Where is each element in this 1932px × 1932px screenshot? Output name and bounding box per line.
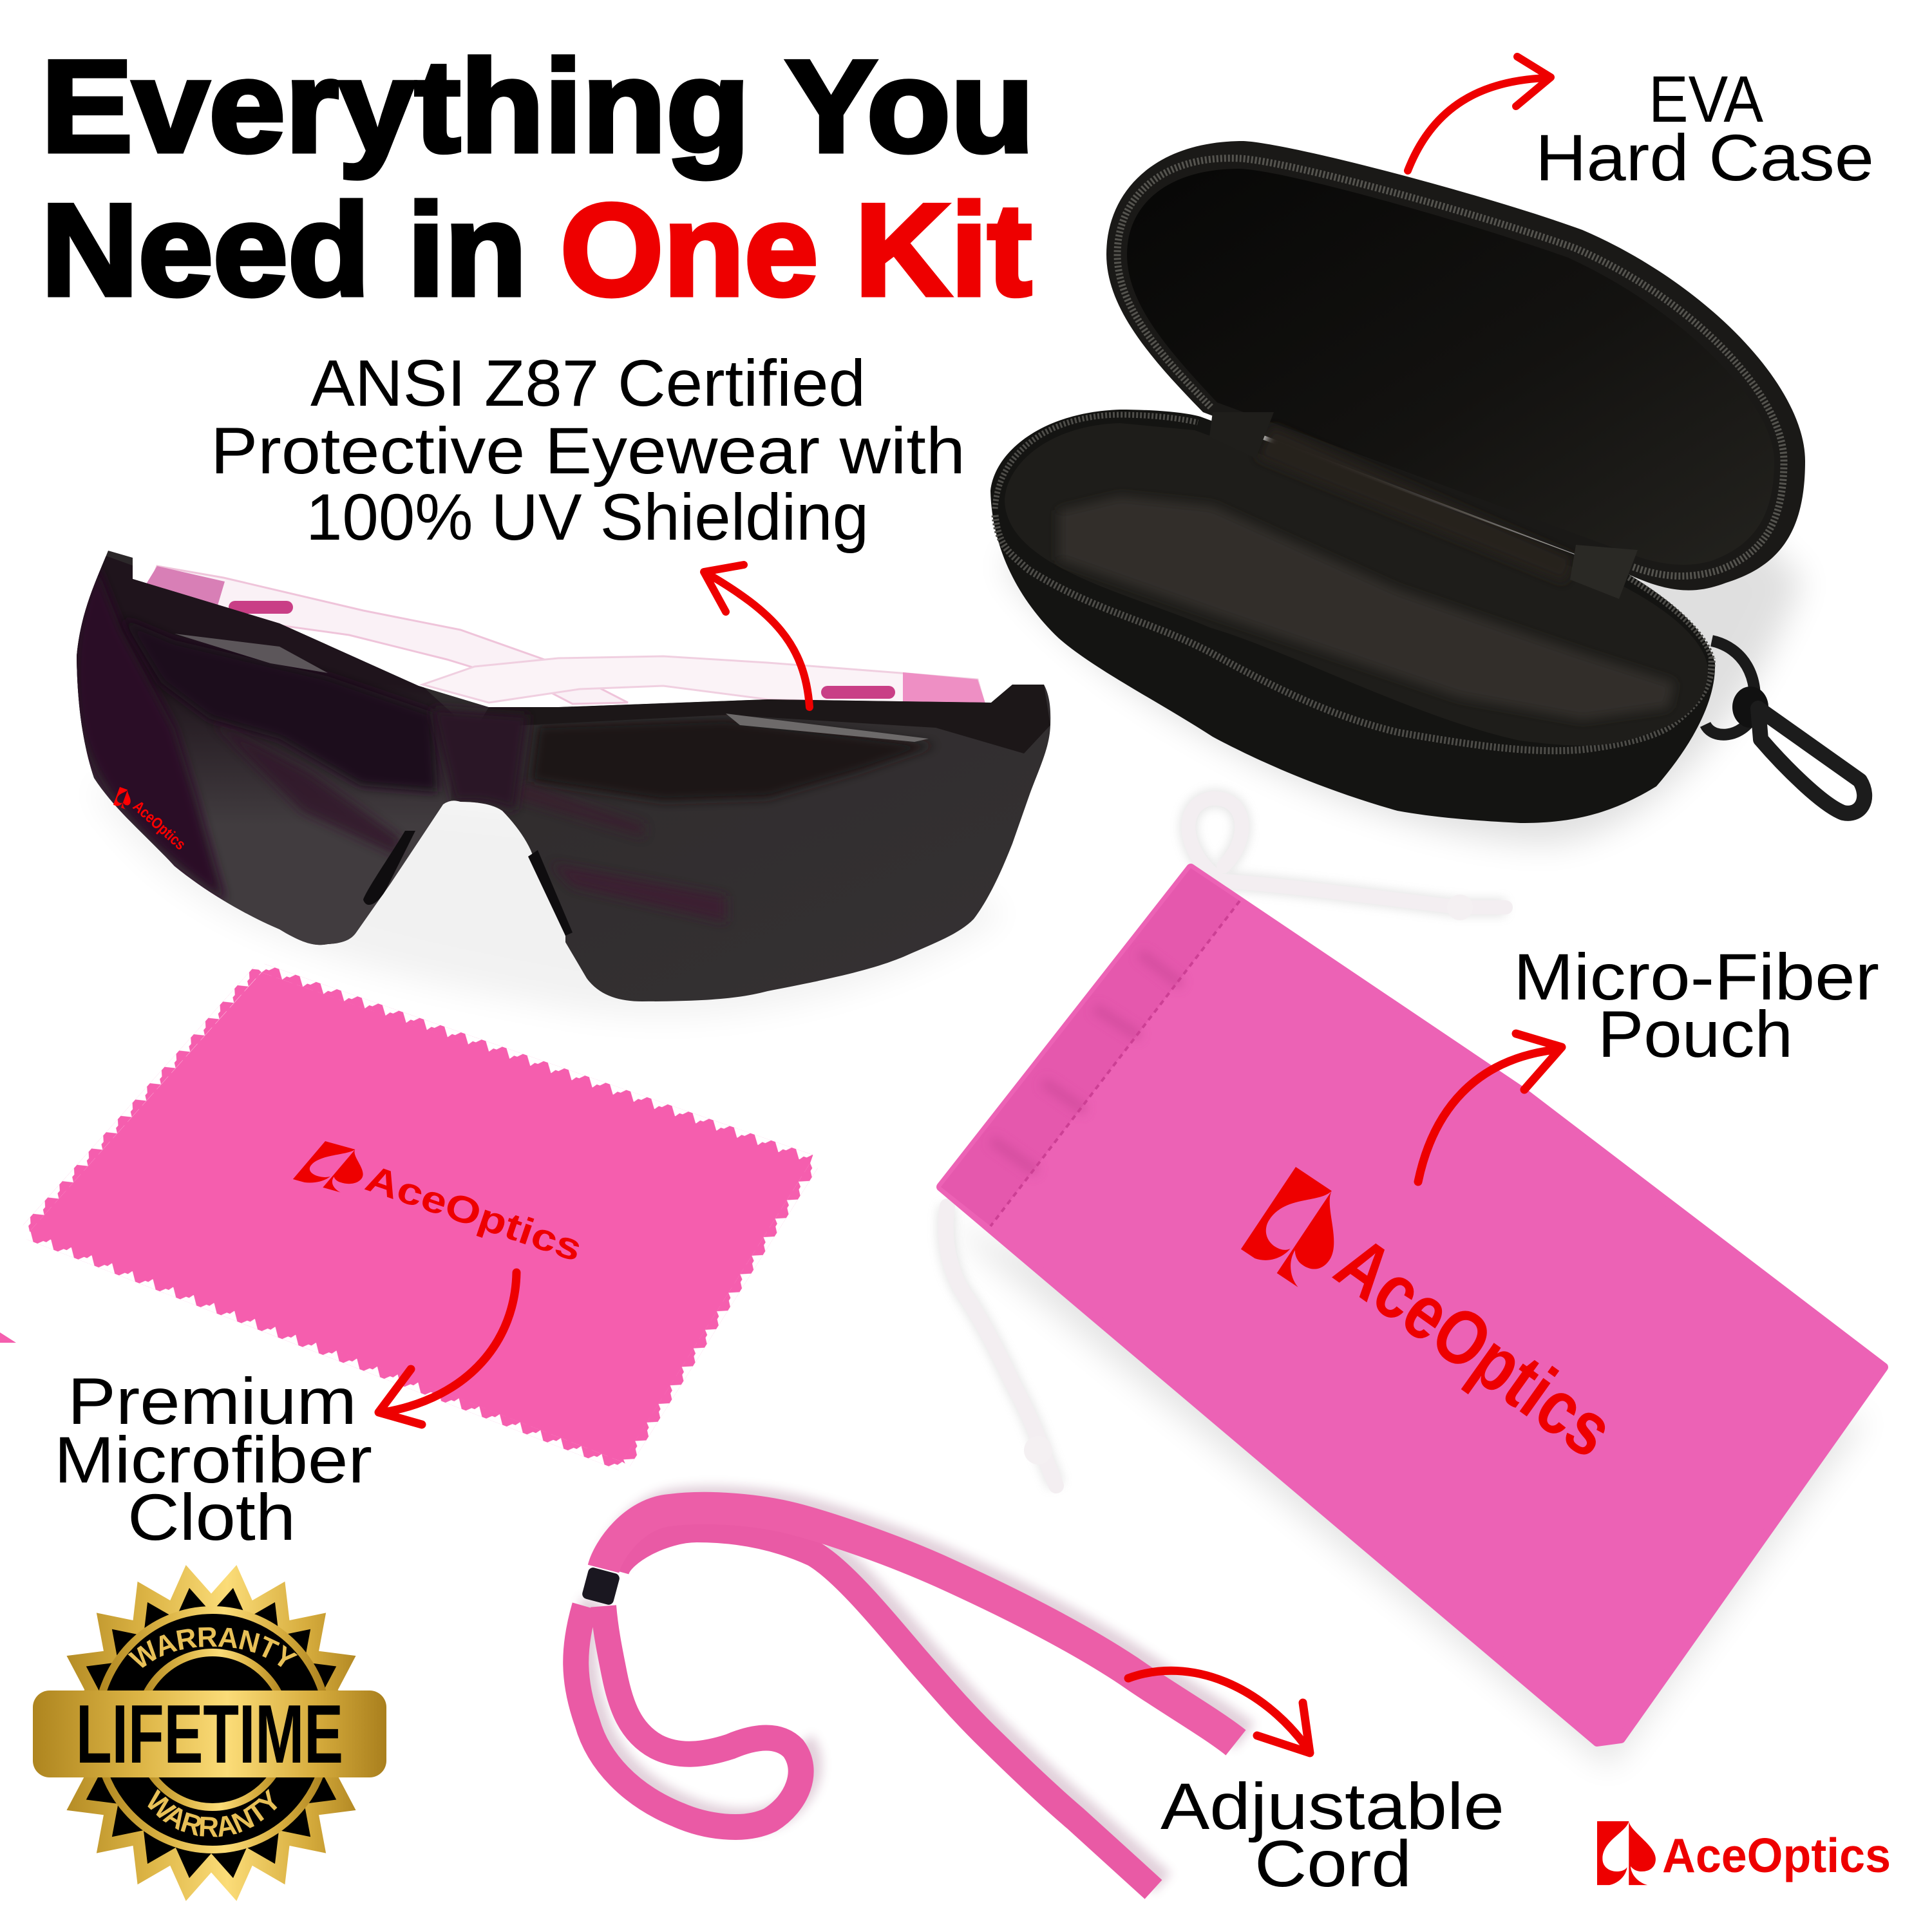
cord shadow [585,1502,1245,1883]
title: Everything You [41,33,1034,180]
arrow: pouch [1418,1034,1562,1182]
label: EVA hard case: Hard Case [1535,121,1874,194]
ruffles [992,953,1182,1172]
left strap [1209,412,1274,459]
serrated edge: left [23,966,261,1231]
right nose pad [528,850,573,936]
bottom warranty text: WARRANTY [147,1789,277,1837]
title: Need in [41,177,527,323]
gathered top [941,868,1240,1226]
lens base [64,541,1063,1011]
label: premium microfiber cloth [54,1365,372,1554]
black star [73,1588,350,1878]
label: ANSI eyewear [211,346,965,554]
top drawcord [1188,799,1506,907]
left lens maroon strip [75,567,225,902]
clip pivot [1732,687,1768,728]
label: ANSI eyewear: Protective Eyewear with [211,414,965,488]
seam stitching [990,901,1240,1226]
gold star seal [51,1565,372,1901]
upper long strand [603,1508,1236,1743]
label: adjustable cord: Adjustable [1160,1770,1504,1843]
arrow: cloth [379,1273,516,1425]
lifetime warranty badge [33,1565,386,1901]
outer ring [97,1610,328,1850]
left lens highlight [175,634,328,673]
drawcord shadow [946,799,1506,1486]
label: EVA hard case: EVA [1649,62,1763,136]
hinge back wall [1256,425,1575,583]
title: One Kit [560,177,1032,323]
pouch shadow [947,1224,1868,1768]
label: micro-fiber pouch: Pouch [1598,998,1793,1071]
label: adjustable cord: Cord [1255,1827,1412,1900]
label: EVA hard case [1535,62,1874,194]
pouch [941,799,1884,1768]
microfiber cloth [0,964,818,1470]
right lens streak upper [515,782,644,837]
logo: AceOptics [1597,1821,1891,1885]
lower knot [1024,1436,1052,1464]
arrow: eyewear [704,565,810,707]
clip loop [1758,708,1864,813]
bridge [431,708,528,811]
pouch logo icon [1241,1167,1362,1293]
label: ANSI eyewear: ANSI Z87 Certified [310,346,866,420]
rear grip [235,601,287,614]
base rear zipper [995,415,1712,658]
lower drawcord [946,1206,1056,1486]
cloth sliver at left edge [0,1332,16,1343]
right lens dark reflection [531,719,936,801]
label: premium microfiber cloth: Premium [68,1365,357,1438]
serrated edge: top [261,964,813,1164]
lower long strand [616,1530,1153,1889]
label: micro-fiber pouch: Micro-Fiber [1513,940,1879,1014]
base interior [1005,423,1708,746]
rear pink tip [145,566,225,612]
cord slider [581,1566,621,1606]
hard case [990,141,1864,844]
front grip [828,686,889,699]
sunglasses [64,541,1063,1016]
cloth body [30,972,810,1462]
case base [990,410,1715,823]
glasses shadow [90,773,1005,1016]
ribbon [33,1690,386,1777]
loop strand [576,1606,801,1827]
serrated edge: bottom [26,1231,622,1470]
temple arm: front [422,656,984,703]
top warranty text: WARRANTY [128,1627,298,1668]
logo icon [1597,1821,1656,1885]
top knot [1447,895,1473,920]
label: ANSI eyewear: 100% UV Shielding [306,480,869,554]
right lens highlight [726,714,929,742]
lid interior [1127,169,1774,565]
pouch body [941,868,1884,1742]
top rim shadow [477,685,1050,753]
adjustable cord [576,1502,1245,1889]
arrow: EVA case [1408,57,1551,171]
left lens [64,541,454,947]
label: premium microfiber cloth: Cloth [128,1481,296,1554]
arrow: cord [1128,1671,1310,1753]
left lens maroon streak [227,737,402,857]
label: adjustable cord [1160,1770,1504,1900]
front pink tip [903,672,985,703]
left nose pad [363,831,415,905]
title [41,33,1034,323]
right strap [1570,545,1638,599]
temple arm: rear [150,566,628,704]
cloth logo icon [293,1141,381,1195]
serrated edge: right [622,1163,818,1466]
label: micro-fiber pouch [1513,940,1879,1071]
cloth logo text: AceOptics [361,1157,587,1270]
lifetime text: LIFETIME [76,1688,343,1781]
right lens maroon streak [551,864,726,922]
inner ring [138,1653,287,1807]
lens assembly [64,541,1063,1011]
case lid [1106,141,1805,591]
lens logo [113,787,189,853]
clip ring [1705,641,1755,735]
base front zipper [995,515,1712,751]
lid zipper [1117,158,1784,576]
pouch logo text: AceOptics [1321,1220,1629,1474]
left lens dark reflection [122,618,438,792]
base floor [1059,496,1674,720]
label: premium microfiber cloth: Microfiber [54,1423,372,1497]
logo text: AceOptics [1662,1828,1891,1882]
lens logo: AceOptics [129,797,189,853]
case shadow [1005,451,1803,844]
